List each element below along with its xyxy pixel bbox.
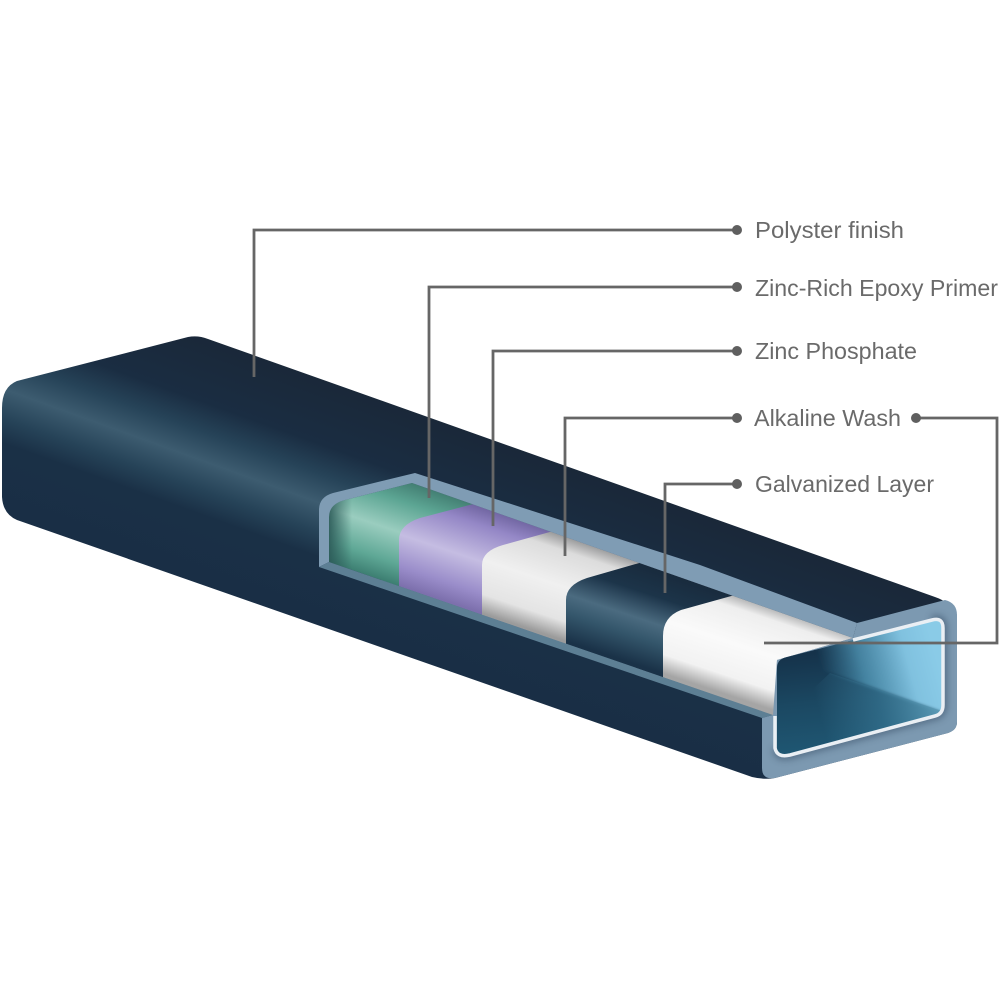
- layer: navy band: [566, 563, 852, 678]
- left inner shading: [329, 499, 350, 568]
- frame inner shadow: [777, 619, 943, 756]
- layer: green zinc-rich epoxy primer: [329, 483, 550, 586]
- opening rim: [775, 619, 943, 756]
- layer: purple zinc phosphate: [399, 504, 639, 615]
- leader: Alkaline Wash: [565, 413, 742, 556]
- label: Polyster finish: Polyster finish: [755, 217, 904, 243]
- cut edge: upper and left wall: [319, 473, 857, 638]
- exposed coating layers: [329, 483, 853, 716]
- layer: white galvanized layer: [663, 596, 852, 715]
- label: Zinc Phosphate: Zinc Phosphate: [755, 338, 917, 364]
- opening back wall light: [820, 621, 942, 710]
- opening floor light: [824, 673, 940, 738]
- tube body: [2, 336, 957, 779]
- layer: white alkaline wash: [482, 532, 732, 644]
- leader: Zinc-Rich Epoxy Primer: [429, 282, 742, 498]
- leader: Polyster finish: [254, 225, 742, 377]
- infographic: coated tube cross-section: [2, 221, 998, 779]
- leader: Galvanized Layer: [665, 479, 742, 593]
- label: Zinc-Rich Epoxy Primer: Zinc-Rich Epoxy Primer: [755, 275, 998, 301]
- tube opening: [773, 618, 945, 758]
- label: Alkaline Wash: Alkaline Wash: [754, 405, 901, 431]
- front end frame: [762, 600, 957, 778]
- leader: Zinc Phosphate: [493, 346, 742, 526]
- leader: Alkaline Wash to tube interior: [764, 413, 997, 643]
- label: Galvanized Layer: Galvanized Layer: [755, 471, 934, 497]
- cut edge: lower lip: [319, 562, 773, 718]
